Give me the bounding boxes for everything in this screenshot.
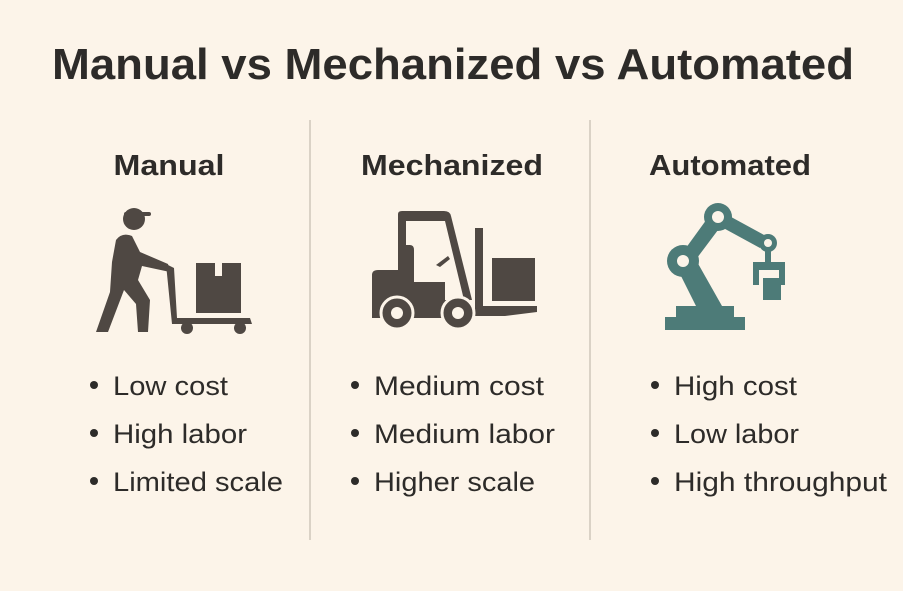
bullets: mechanized <box>351 371 555 497</box>
heading: Automated: Automated <box>649 150 811 182</box>
bullets: automated: High throughput <box>674 467 888 497</box>
bullets: automated: High cost <box>674 371 798 401</box>
bullets: mechanized: Higher scale <box>374 467 535 497</box>
panel: automated <box>649 150 888 497</box>
icon: forklift <box>372 211 537 329</box>
bullets: mechanized: Medium labor <box>374 419 555 449</box>
bullets: automated <box>651 371 888 497</box>
heading: Mechanized: Mechanized <box>361 150 543 182</box>
icon: worker with cart <box>96 208 252 334</box>
bullets: automated: Low labor <box>674 419 799 449</box>
panel: manual <box>90 150 283 497</box>
bullets: mechanized: Medium cost <box>374 371 545 401</box>
bullets: manual <box>90 371 283 497</box>
icon: robot arm <box>665 203 785 330</box>
bullets: manual: High labor <box>113 419 247 449</box>
title: Manual vs Mechanized vs Automated <box>52 40 854 89</box>
bullets: manual: Limited scale <box>113 467 283 497</box>
bullets: manual: Low cost <box>113 371 229 401</box>
heading: Manual: Manual <box>114 150 224 182</box>
panel: mechanized <box>351 150 555 497</box>
